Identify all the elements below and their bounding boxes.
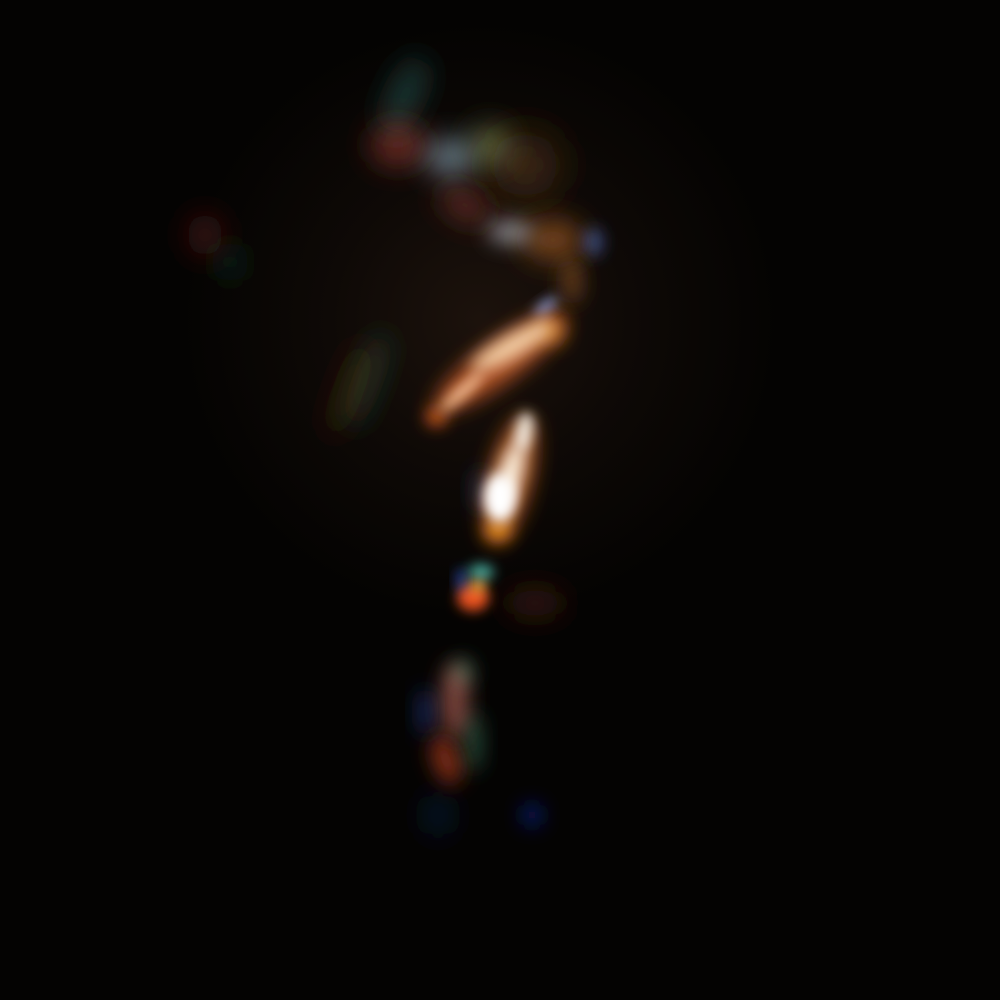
central bright source bbox=[473, 411, 547, 549]
upper nebula knots bbox=[187, 53, 602, 442]
lower knot bbox=[457, 564, 565, 617]
upper bright streak bbox=[424, 294, 576, 426]
lower chain of knots bbox=[420, 659, 541, 835]
